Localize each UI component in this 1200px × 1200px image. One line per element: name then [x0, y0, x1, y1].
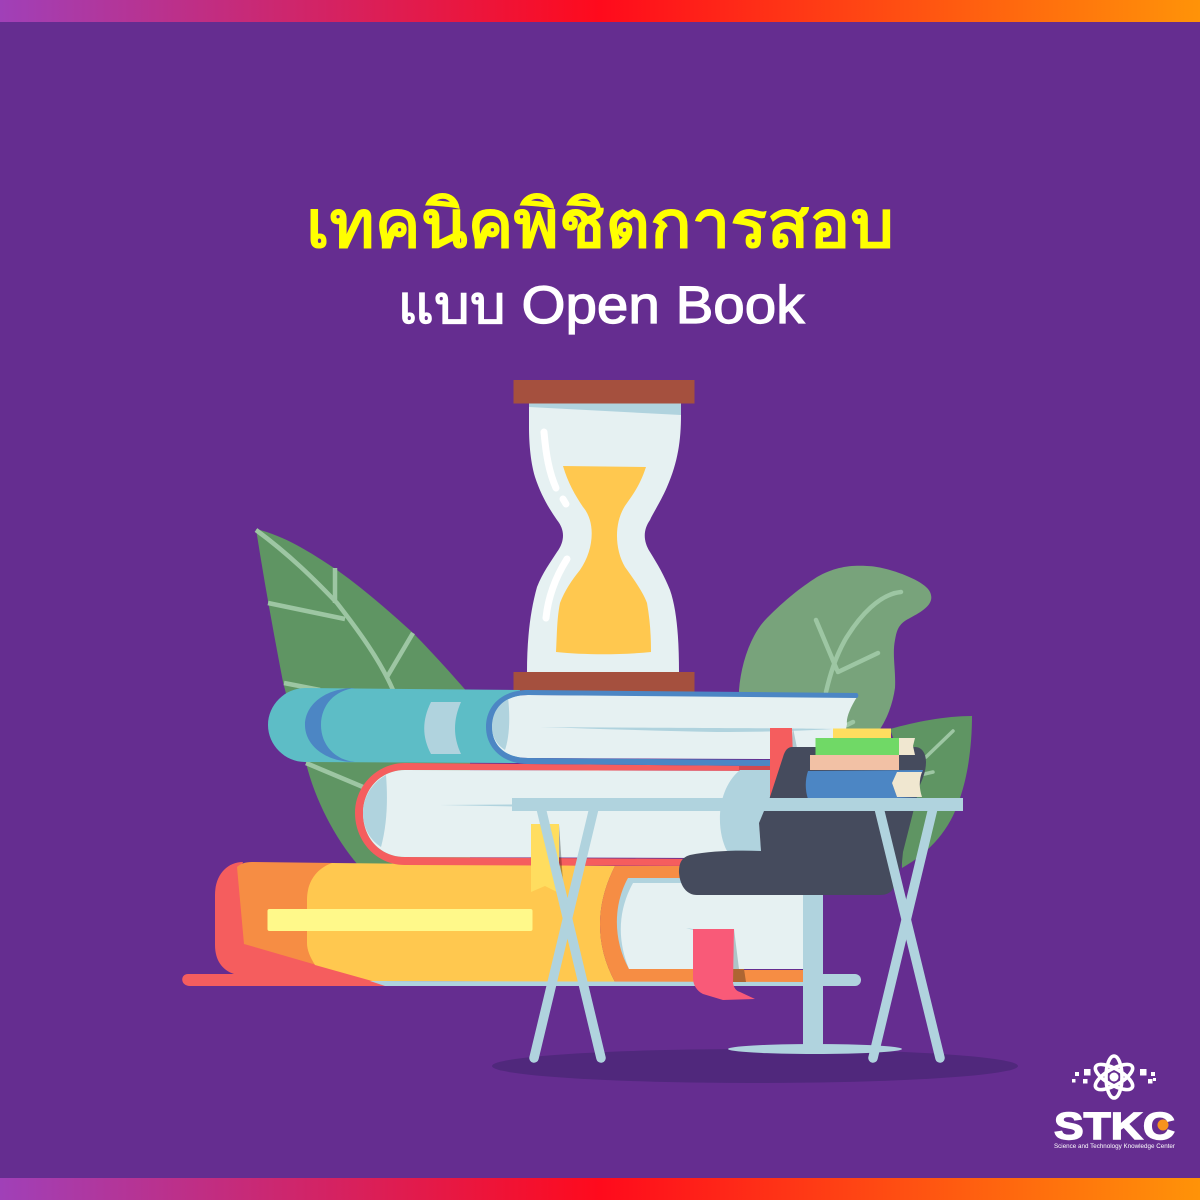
- hourglass sand: [556, 466, 651, 654]
- bottom gradient bar: [0, 1178, 1200, 1200]
- small book stack: [806, 728, 923, 799]
- red bookmark: [770, 728, 797, 797]
- title: เทคนิคพิชิตการสอบ: [306, 187, 894, 261]
- middle red book: [355, 763, 770, 866]
- pink bookmark: [686, 928, 755, 1000]
- yellow bookmark: [531, 824, 563, 893]
- logo atom icon: [1072, 1056, 1156, 1098]
- floor shadow: [492, 1049, 1018, 1083]
- top gradient bar: [0, 0, 1200, 22]
- right large leaf: [739, 566, 931, 732]
- stool post and base: [728, 890, 902, 1054]
- subtitle: แบบ Open Book: [398, 276, 805, 335]
- logo: STKC: STKC: [1054, 1106, 1175, 1148]
- logo: STKC: Science and Technology Knowledge Center: [1054, 1144, 1175, 1150]
- dark chair: [679, 747, 926, 895]
- table: [512, 798, 963, 1058]
- top teal book: [268, 688, 858, 766]
- left leaf: [256, 529, 470, 870]
- logo: STKC: [1054, 1056, 1175, 1150]
- right small leaf: [890, 716, 972, 868]
- bottom yellow book: [182, 862, 861, 986]
- hourglass: [514, 380, 694, 692]
